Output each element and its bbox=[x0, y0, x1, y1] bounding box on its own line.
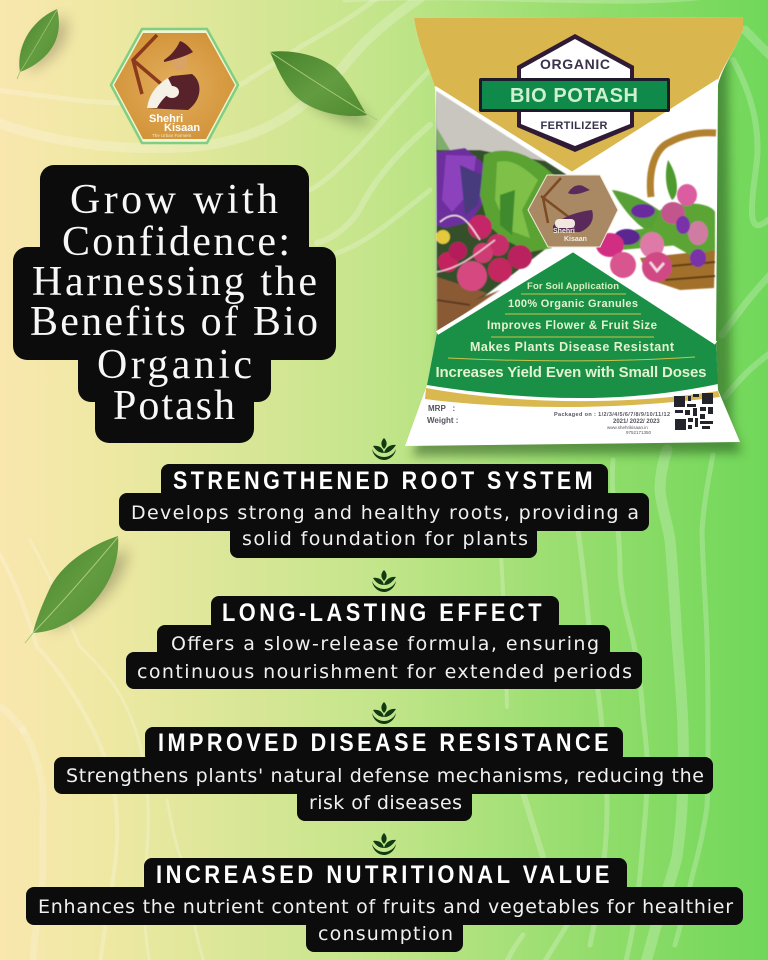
section 1: strengthened root system bbox=[119, 438, 649, 558]
bag claims text bbox=[436, 281, 706, 381]
bag claims text: Makes Plants Disease Resistant bbox=[470, 340, 675, 354]
icon: sprout bbox=[372, 833, 396, 855]
icon: sprout bbox=[372, 570, 396, 592]
panel: title bbox=[13, 165, 336, 443]
bag claims text: Improves Flower & Fruit Size bbox=[487, 320, 657, 332]
bag claims text: 100% Organic Granules bbox=[508, 298, 638, 310]
description panel bbox=[119, 493, 649, 558]
white V lines bbox=[435, 80, 718, 173]
heading panel bbox=[145, 727, 623, 763]
title text bbox=[30, 177, 318, 429]
bag shadow bbox=[412, 55, 742, 456]
heading panel: STRENGTHENED ROOT SYSTEM bbox=[173, 467, 596, 495]
bag bottom info: MRP : bbox=[428, 404, 455, 413]
title text: Harnessing the bbox=[32, 259, 317, 305]
logo on bag: Kisaan bbox=[564, 236, 587, 243]
description panel: Offers a slow-release formula, ensuring bbox=[171, 633, 599, 655]
description panel: consumption bbox=[318, 923, 453, 945]
section 2: long-lasting effect bbox=[126, 570, 642, 689]
heading panel: IMPROVED DISEASE RESISTANCE bbox=[158, 729, 612, 757]
logo on bag: Shehri bbox=[553, 228, 575, 235]
green triangle claims panel bbox=[427, 250, 718, 398]
bag bottom info: Weight : bbox=[427, 416, 458, 425]
title text: Grow with bbox=[70, 177, 278, 223]
title text: Benefits of Bio bbox=[30, 299, 318, 345]
description panel: Develops strong and healthy roots, providing a bbox=[131, 502, 639, 524]
hexagon label: FERTILIZER bbox=[540, 120, 608, 132]
description panel bbox=[126, 625, 642, 689]
bag bottom info bbox=[427, 404, 670, 435]
title text: Potash bbox=[113, 383, 235, 429]
title text: Confidence: bbox=[62, 219, 290, 265]
icon: sprout bbox=[372, 702, 396, 724]
bag bottom info: 9752171350 bbox=[626, 430, 652, 435]
heading panel bbox=[161, 464, 608, 500]
hexagon label: BIO POTASH bbox=[510, 85, 638, 107]
bag claims text: Increases Yield Even with Small Doses bbox=[436, 364, 706, 381]
gold top bbox=[414, 17, 743, 173]
leaf: top right bbox=[270, 51, 377, 125]
description panel bbox=[54, 757, 713, 821]
bag bottom info: 2021/ 2022/ 2023 bbox=[613, 419, 660, 425]
section 4: increased nutritional value bbox=[26, 833, 743, 952]
leaf: middle left bbox=[25, 536, 128, 643]
heading panel: INCREASED NUTRITIONAL VALUE bbox=[156, 861, 613, 889]
bag bottom info: www.shehrikisaan.in bbox=[607, 425, 648, 430]
icon: sprout bbox=[372, 438, 396, 460]
description panel bbox=[26, 887, 743, 952]
logo: Shehri Kisaan hexagon: The Urban Farmers bbox=[152, 133, 192, 138]
hexagon label: ORGANIC bbox=[540, 56, 610, 72]
logo on bag bbox=[528, 175, 618, 247]
leaf: top left bbox=[17, 9, 67, 79]
logo: Shehri Kisaan hexagon: Kisaan bbox=[164, 122, 200, 134]
bag white body bbox=[405, 17, 743, 446]
description panel: Strengthens plants' natural defense mechanisms, reducing the bbox=[66, 765, 704, 787]
product: Bio Potash bag bbox=[405, 17, 743, 456]
bag claims text: For Soil Application bbox=[527, 281, 619, 292]
heading panel: LONG-LASTING EFFECT bbox=[222, 599, 545, 627]
section 3: improved disease resistance bbox=[54, 702, 713, 821]
QR code bbox=[674, 393, 713, 430]
gold band bbox=[425, 388, 720, 407]
logo: Shehri Kisaan hexagon bbox=[111, 29, 238, 143]
description panel: risk of diseases bbox=[309, 792, 462, 814]
bag bottom info: Packaged on : 1/2/3/4/5/6/7/8/9/10/11/12 bbox=[554, 412, 670, 418]
hexagon label bbox=[479, 34, 670, 152]
vegetable photo bbox=[436, 91, 567, 333]
description panel: Enhances the nutrient content of fruits and vegetables for healthier bbox=[38, 896, 733, 918]
tulip and basket photo bbox=[596, 133, 716, 290]
description panel: continuous nourishment for extended periods bbox=[137, 661, 632, 683]
title text: Organic bbox=[97, 342, 252, 388]
description panel: solid foundation for plants bbox=[242, 528, 528, 550]
logo: Shehri Kisaan hexagon: Shehri bbox=[149, 113, 183, 125]
